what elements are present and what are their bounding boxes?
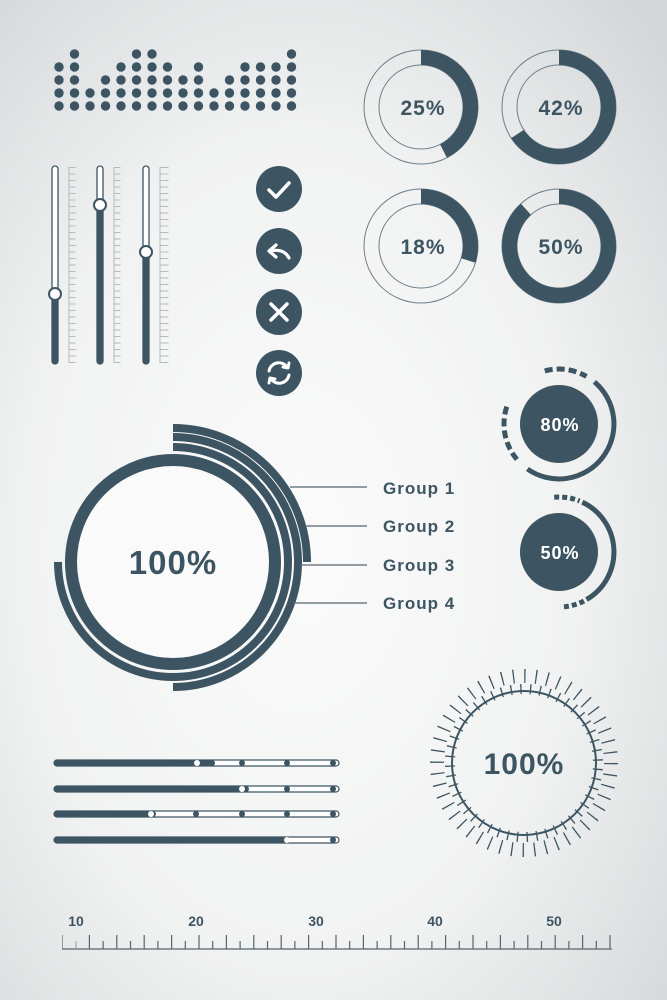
icon: close (256, 289, 302, 335)
slider scales (69, 167, 164, 363)
legend groups: Group 4 (383, 594, 455, 613)
donut: 42%: 42% (538, 97, 584, 120)
slider 1 (49, 166, 61, 364)
dot matrix equalizer (54, 49, 296, 111)
ruler: 20 (188, 913, 204, 929)
donut: 25% (364, 50, 478, 164)
ruler: 30 (308, 913, 324, 929)
tick circle 100% (437, 676, 611, 850)
tick circle 100%: 100% (484, 748, 564, 781)
ruler: 50 (546, 913, 562, 929)
donut: 18%: 18% (400, 236, 446, 259)
icon: undo (256, 228, 302, 274)
progress bars (54, 760, 339, 843)
vertical sliders (49, 166, 164, 364)
icon: check (256, 166, 302, 212)
legend groups (290, 479, 455, 613)
legend groups: Group 2 (383, 517, 455, 536)
ruler: 40 (427, 913, 443, 929)
donut: 50% (502, 189, 616, 303)
legend groups: Group 1 (383, 479, 455, 498)
gauge: 50% (520, 497, 614, 607)
slider 3 (140, 166, 152, 364)
donut: 42% (502, 50, 616, 164)
legend groups: Group 3 (383, 556, 455, 575)
icon: refresh (256, 350, 302, 396)
ruler: 10 (68, 913, 84, 929)
gauge: 80%: 80% (540, 415, 580, 435)
big ring label: 100% (129, 544, 217, 581)
ruler (62, 913, 612, 949)
gauge: 80% (504, 369, 614, 479)
icon buttons (256, 166, 302, 396)
gauge: 50%: 50% (540, 543, 580, 563)
donut: 50%: 50% (538, 236, 584, 259)
donut: 25%: 25% (400, 97, 446, 120)
slider 2 (94, 166, 106, 364)
big multi-ring chart (58, 428, 307, 687)
donut: 18% (364, 189, 478, 303)
